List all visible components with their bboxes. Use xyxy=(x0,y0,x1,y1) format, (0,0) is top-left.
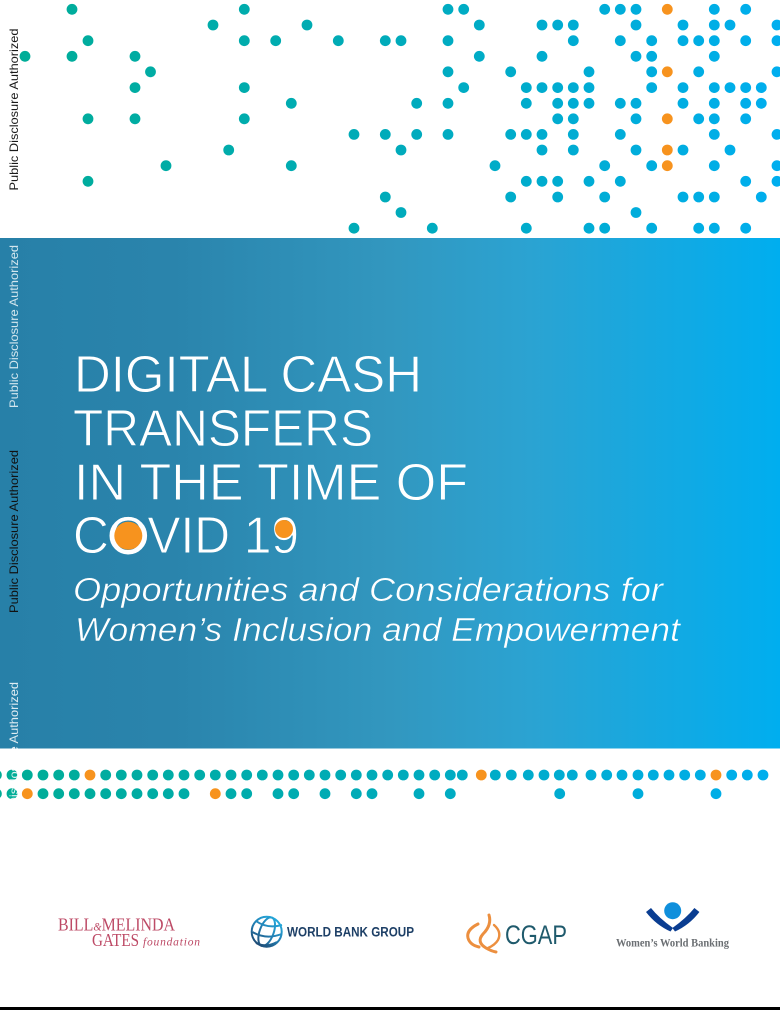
side watermark: public disclosure authorized: Public Disclosure Authorized xyxy=(7,28,21,190)
logo: World Bank Group xyxy=(252,915,414,948)
logo: World Bank Group: WORLD BANK GROUP xyxy=(287,924,414,940)
logo: Bill & Melinda Gates Foundation: BILL&MELINDA xyxy=(58,914,175,934)
dot rows: bottom xyxy=(0,770,768,799)
logo: Bill & Melinda Gates Foundation: foundation xyxy=(143,936,200,948)
side watermark: public disclosure authorized: Public Disclosure Authorized xyxy=(7,682,21,845)
icon: right wing xyxy=(672,908,699,932)
subtitle xyxy=(73,571,682,648)
side watermark: public disclosure authorized: Public Disclosure Authorized xyxy=(7,245,21,408)
subtitle: Women’s Inclusion and Empowerment xyxy=(75,611,682,648)
logo: Women's World Banking: Women’s World Banking xyxy=(616,938,729,950)
logo: Women's World Banking xyxy=(616,902,729,950)
panel: title band xyxy=(0,238,780,748)
title: IN THE TIME OF xyxy=(74,454,468,512)
icon: orange swirl xyxy=(468,915,499,952)
icon: orange dot in the numeral 9 xyxy=(275,520,293,538)
title xyxy=(73,346,468,565)
logo: CGAP xyxy=(468,915,567,952)
side watermark: public disclosure authorized: Public Disclosure Authorized xyxy=(7,450,21,613)
title: TRANSFERS xyxy=(73,400,373,458)
title: COVID 19 xyxy=(73,507,299,565)
logo: CGAP: CGAP xyxy=(505,920,567,950)
icon: white ring and orange dot of the letter O xyxy=(111,519,145,553)
title: DIGITAL CASH xyxy=(74,346,422,404)
icon: globe xyxy=(252,915,282,948)
logo: Bill & Melinda Gates Foundation xyxy=(58,914,200,950)
bottom black edge xyxy=(0,1007,780,1010)
icon: left wing xyxy=(646,908,673,932)
side watermark: public disclosure authorized xyxy=(7,28,21,845)
subtitle: Opportunities and Considerations for xyxy=(73,571,665,608)
dot field: top xyxy=(20,4,780,234)
logo: Bill & Melinda Gates Foundation: GATES xyxy=(92,930,139,950)
icon: blue circle xyxy=(664,902,681,919)
